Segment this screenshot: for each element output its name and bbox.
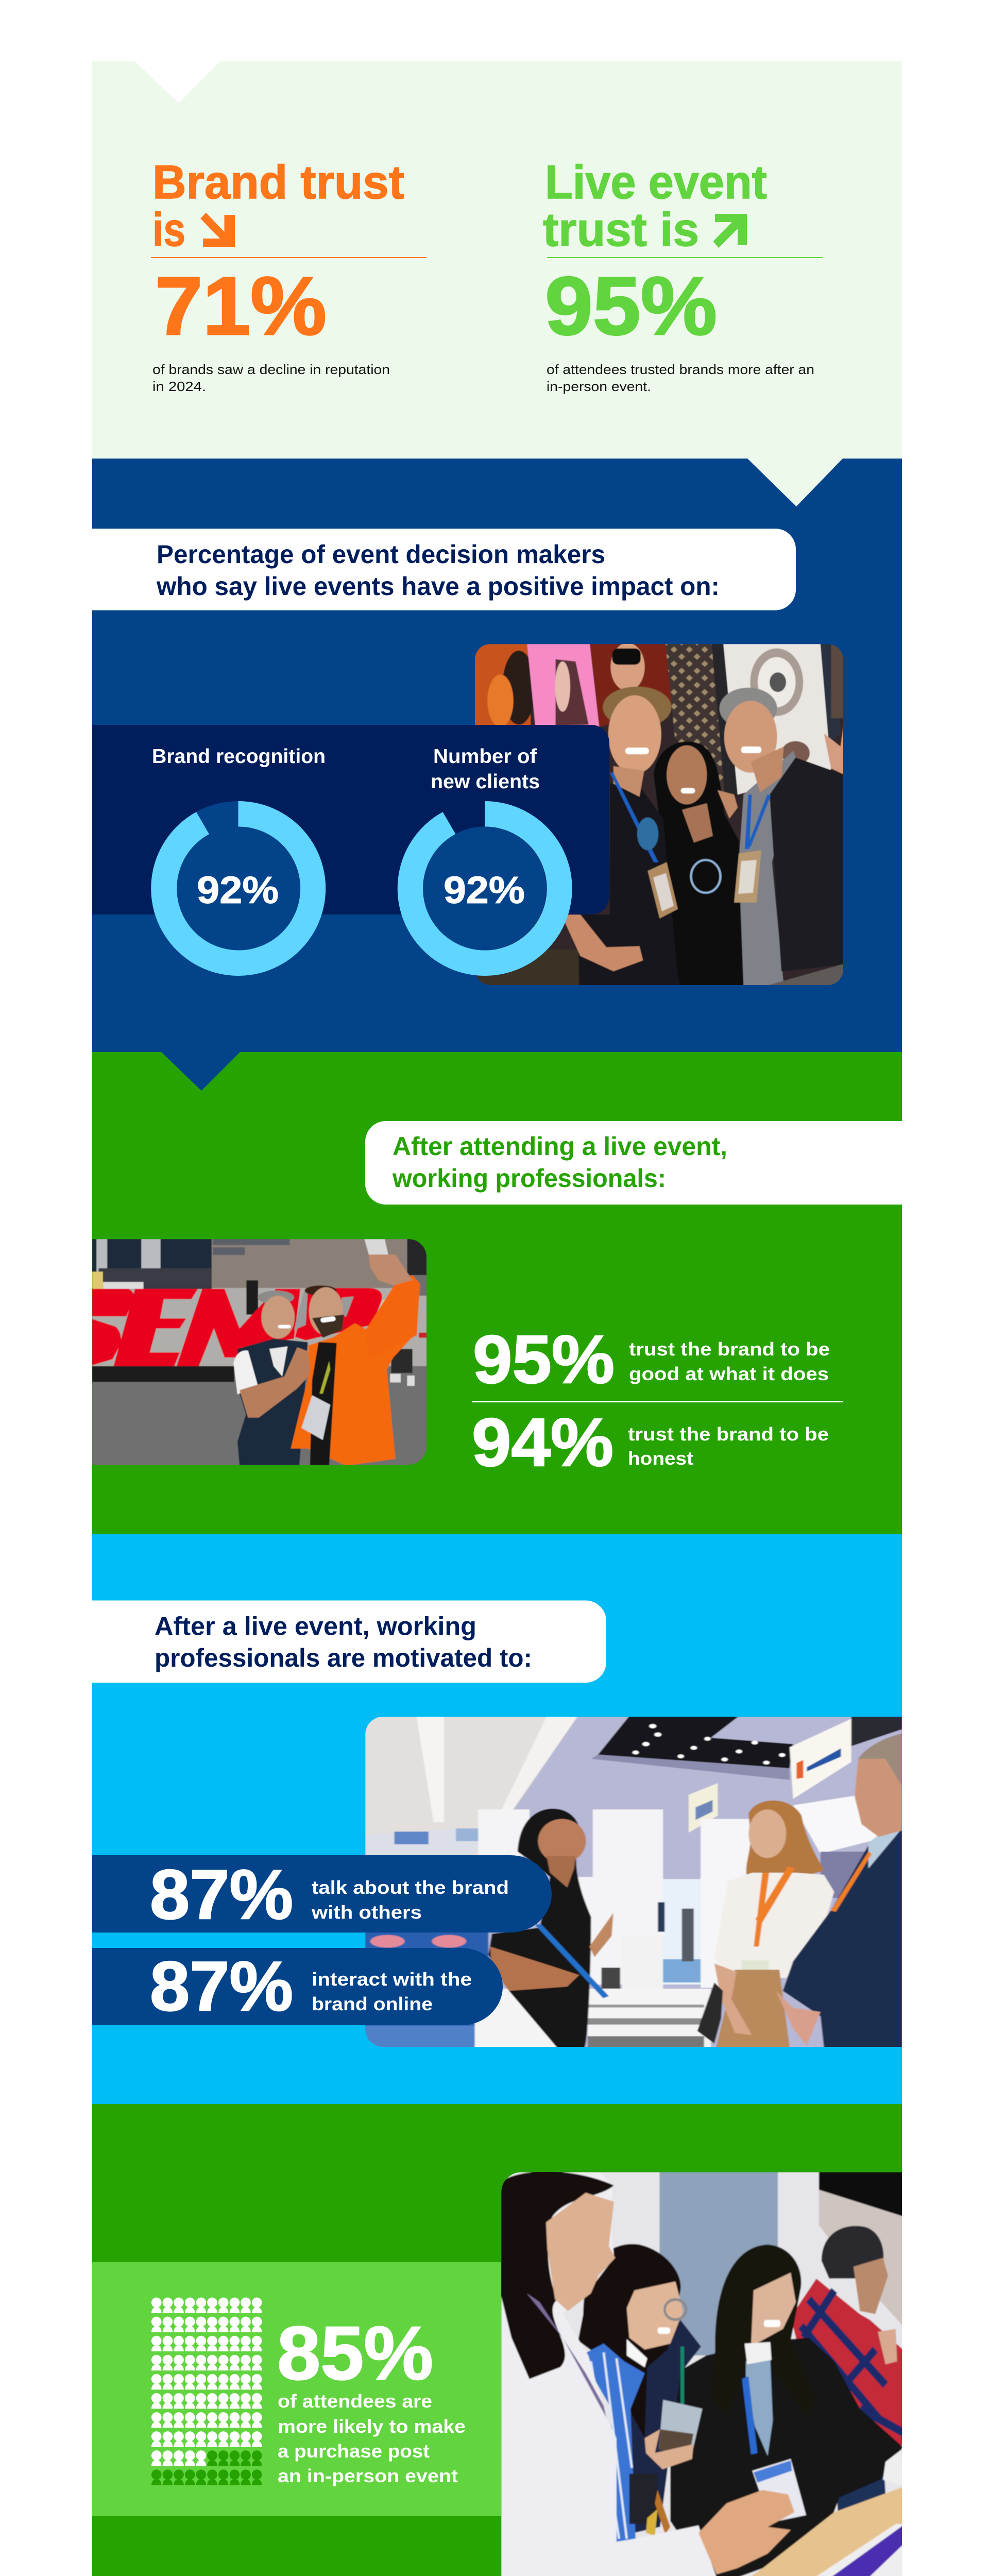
text: attendees trusted: of attendees trusted brands more after an — [547, 362, 814, 377]
heading bar: after attending — [365, 1121, 902, 1205]
stat: 95%: 95% — [545, 260, 717, 352]
heading bar: motivated: professionals are motivated to: — [155, 1643, 532, 1672]
text: brands decline — [152, 362, 390, 394]
photo: attendees at a booth — [501, 2172, 903, 2576]
heading: brand trust — [152, 156, 404, 256]
icon: arrow up right — [713, 214, 747, 248]
panel: dark stats backing — [92, 725, 609, 914]
notch: from navy panel — [161, 1052, 240, 1091]
text: attendees trusted: in-person event. — [547, 379, 651, 394]
heading: live event trust — [543, 156, 767, 256]
divider — [472, 1401, 843, 1402]
panel: brand trust vs live event trust — [92, 61, 902, 459]
heading bar: decision makers: Percentage of event decision makers — [157, 540, 605, 569]
text: more likely to purchase — [278, 2391, 466, 2486]
stat pill: interact online: brand online — [312, 1993, 433, 2014]
divider: brand trust — [151, 257, 427, 258]
stat pill: talk about the brand — [92, 1855, 552, 1934]
stat: 94%: 94% — [472, 1404, 613, 1480]
notch: top — [135, 61, 220, 103]
heading: brand trust: Brand trust — [152, 156, 404, 209]
text: honest — [628, 1423, 829, 1469]
stat: 85%: 85% — [277, 2311, 433, 2396]
notch: from light panel — [747, 459, 843, 506]
stat pill: talk about the brand: talk about the brand — [312, 1877, 509, 1898]
stat pill: interact online — [92, 1947, 503, 2025]
text: attendees trusted — [547, 362, 814, 394]
panel: purchase intent — [92, 2104, 903, 2576]
heading: live event trust: Live event — [545, 156, 767, 209]
text: honest: honest — [628, 1448, 693, 1469]
label: number of new clients: new clients — [431, 771, 540, 793]
label: brand recognition: Brand recognition — [152, 745, 326, 768]
heading bar: after attending: After attending a live event, — [393, 1132, 727, 1161]
stat pill: talk about the brand: 87% — [150, 1855, 293, 1934]
text: more likely to purchase: a purchase post — [278, 2441, 430, 2462]
heading bar: decision makers: who say live events have a positive impact on: — [156, 572, 720, 601]
stat: 95%: 95% — [473, 1321, 615, 1397]
panel: working professionals trust — [92, 1052, 902, 1534]
panel: motivated to — [92, 1534, 902, 2104]
photo: trade show conversation — [365, 1717, 902, 2047]
chart: donut new clients 92% — [398, 801, 572, 976]
chart: donut brand recognition 92%: 92% — [197, 869, 279, 911]
text: good at what it does: trust the brand to be — [629, 1338, 830, 1360]
icon array: 85 of 100 people — [151, 2298, 262, 2485]
heading: live event trust: trust is — [543, 204, 699, 256]
stat: 71%: 71% — [155, 260, 327, 352]
heading: brand trust: is — [152, 204, 185, 256]
text: brands decline: in 2024. — [152, 379, 206, 394]
text: brands decline: of brands saw a decline in reputation — [152, 362, 390, 377]
photo: three attendees smiling — [474, 643, 845, 986]
text: more likely to purchase: an in-person event — [278, 2465, 458, 2486]
text: good at what it does: good at what it does — [629, 1363, 829, 1384]
stat pill: interact online: interact with the — [312, 1969, 472, 1990]
panel: light green stat backing — [92, 2262, 501, 2516]
chart: donut new clients 92%: 92% — [444, 869, 525, 911]
panel: decision makers — [92, 459, 902, 1052]
text: more likely to purchase: more likely to make — [278, 2416, 466, 2437]
heading bar: motivated — [92, 1600, 606, 1683]
heading bar: after attending: working professionals: — [392, 1164, 666, 1193]
heading bar: motivated: After a live event, working — [155, 1612, 476, 1640]
label: number of new clients: Number of — [433, 745, 537, 768]
stat pill: talk about the brand: with others — [311, 1902, 422, 1923]
heading bar: decision makers — [92, 529, 796, 610]
stat pill: interact online: 87% — [150, 1947, 293, 2025]
label: number of new clients — [431, 745, 540, 793]
divider: live event — [547, 257, 823, 258]
icon: arrow down right — [200, 213, 235, 247]
text: honest: trust the brand to be — [628, 1423, 829, 1445]
photo: two men taking a selfie — [92, 1239, 427, 1466]
text: good at what it does — [629, 1338, 830, 1384]
text: more likely to purchase: of attendees are — [278, 2391, 432, 2412]
chart: donut brand recognition 92% — [151, 801, 326, 976]
